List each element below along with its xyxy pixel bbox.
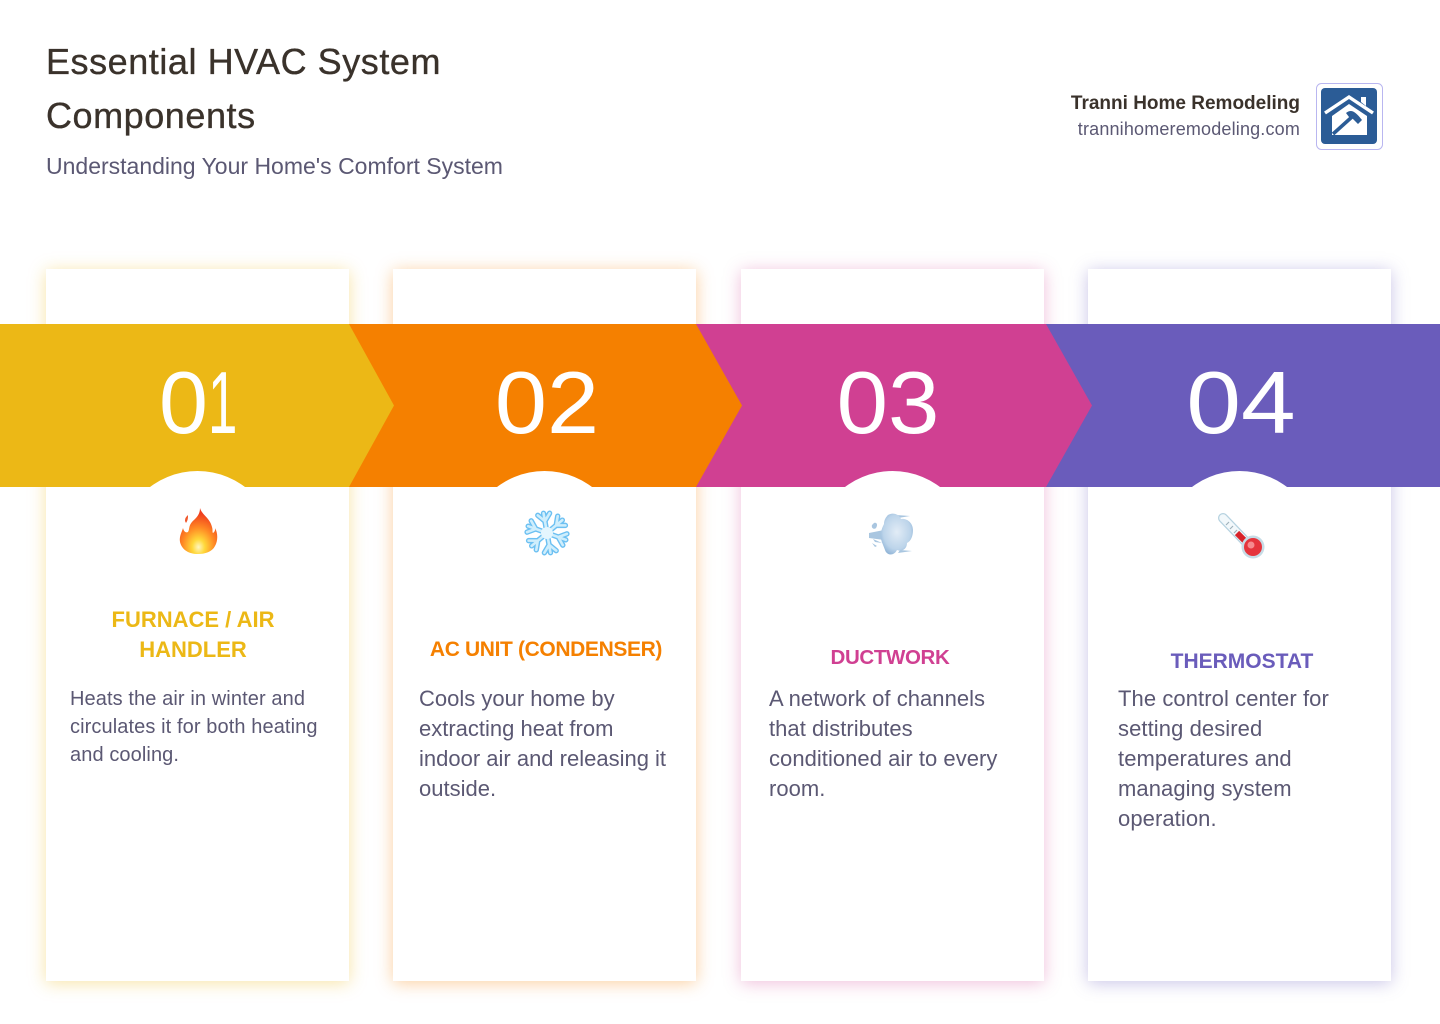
card 1 heading [112,607,274,662]
card 4 text: managing system [1118,776,1292,801]
step number 02: 02 [495,353,599,452]
card 1 text [70,688,318,766]
panel: card 3 [741,269,1044,981]
card 3 text: conditioned air to every [769,746,997,771]
step number 03: 03 [837,353,939,452]
panel: card 1 [46,269,349,981]
card 1 heading: HANDLER [139,637,247,662]
subtitle: Understanding Your Home's Comfort System [46,153,503,179]
card 1 text: and cooling. [70,744,179,766]
card 1 text: circulates it for both heating [70,716,318,738]
brand block [1071,83,1383,150]
step number 01: 1 [208,353,237,452]
card 1 heading: FURNACE / AIR [112,607,274,632]
panel: card 4 [1088,269,1391,981]
header: title block [46,41,503,179]
icon: snowflake [524,510,570,556]
card 4 text: operation. [1118,806,1217,831]
step number 04: 04 [1186,353,1296,452]
card 3 text: that distributes [769,716,913,741]
card 3 heading: DUCTWORK [831,646,949,669]
icon: brand logo [1316,83,1383,150]
icon: fire [180,508,218,554]
title [46,41,441,136]
brand url: trannihomeremodeling.com [1078,119,1300,139]
card 2 text: outside. [419,776,496,801]
card 4 text: setting desired [1118,716,1262,741]
card 4 text [1118,686,1329,831]
card 3 text [769,686,998,801]
card 3 text: A network of channels [769,686,985,711]
icon: wind cloud [869,514,913,554]
card 2 text [419,686,666,801]
step number 01 [159,353,237,452]
card 2 text: Cools your home by [419,686,615,711]
card 3 text: room. [769,776,825,801]
step number 01: 0 [159,353,208,452]
card 4 text: temperatures and [1118,746,1292,771]
panel: card 2 [393,269,696,981]
card 4 heading: THERMOSTAT [1171,650,1313,673]
card 2 heading: AC UNIT (CONDENSER) [430,638,662,661]
icon: thermometer [1218,513,1264,558]
title: Essential HVAC System [46,41,441,82]
card 2 text: indoor air and releasing it [419,746,666,771]
title: Components [46,95,256,136]
chevron banner [0,324,1440,487]
card 1 text: Heats the air in winter and [70,688,305,710]
card 2 text: extracting heat from [419,716,613,741]
brand name: Tranni Home Remodeling [1071,93,1300,114]
card 4 text: The control center for [1118,686,1329,711]
